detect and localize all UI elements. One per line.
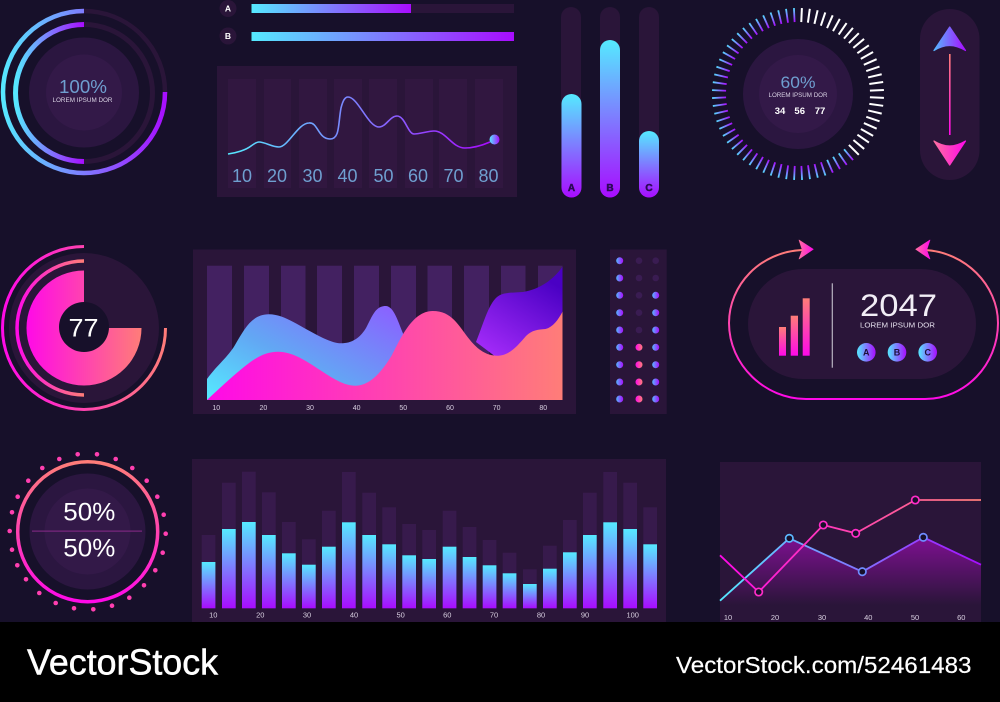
panel: bar chart: 50 — [397, 610, 405, 620]
panel: area chart: 60 — [446, 405, 454, 412]
dial gauge: 60%: 34 — [775, 106, 786, 117]
panel: two-series line chart: 10 — [724, 613, 732, 622]
gauge: 77 donut — [2, 246, 166, 410]
progress bars A and B — [220, 0, 514, 44]
panel: smooth line chart: 10 — [232, 166, 252, 186]
gauge: 100% rings: 100% — [59, 77, 107, 97]
panel: two-series line chart: 60 — [957, 613, 965, 622]
panel: bar chart: 60 — [443, 610, 451, 620]
panel: smooth line chart: 50 — [373, 166, 394, 186]
panel: two-series line chart: 40 — [864, 613, 872, 622]
panel: bar chart: 10 — [209, 610, 217, 620]
panel: bar chart: 90 — [581, 610, 589, 620]
panel: dot matrix — [610, 250, 667, 414]
panel: 2047 stat pill: C — [924, 348, 931, 358]
vertical bars A B C: B — [606, 183, 614, 194]
panel: bar chart: 80 — [537, 610, 545, 620]
panel: two-series line chart: 30 — [818, 613, 826, 622]
panel: smooth line chart: 70 — [443, 166, 464, 186]
panel: bar chart: 40 — [350, 610, 358, 620]
gauge: 100% rings: LOREM IPSUM DOR — [52, 97, 113, 104]
coloured ticks bottom and left side — [712, 8, 826, 180]
panel: bar chart: 30 — [303, 610, 311, 620]
panel: smooth line chart — [217, 66, 517, 197]
footer band — [0, 622, 1000, 702]
gauge: 50% / 50%: 50% — [63, 499, 115, 527]
white ticks — [800, 8, 884, 156]
dial gauge: 60%: 77 — [815, 106, 825, 117]
dial gauge: 60% — [712, 8, 884, 180]
footer band: VectorStock — [27, 641, 219, 682]
vertical bars A B C: A — [568, 183, 575, 194]
panel: 2047 stat pill: 2047 — [860, 287, 937, 323]
panel: area chart: 10 — [212, 405, 220, 412]
panel: area chart — [193, 250, 576, 414]
loop arrows around 2047 panel — [729, 240, 998, 399]
panel: two-series line chart — [720, 462, 981, 622]
panel: bar chart: 70 — [490, 610, 498, 620]
dial gauge: 60%: 56 — [794, 106, 805, 117]
panel: up and down arrows — [920, 9, 980, 180]
gauge: 77 donut: 77 — [68, 314, 98, 342]
panel: 2047 stat pill: LOREM IPSUM DOR — [860, 321, 936, 330]
panel: area chart: 80 — [539, 405, 547, 412]
panel: bar chart — [192, 459, 666, 622]
panel: bar chart: 20 — [256, 610, 264, 620]
progress bars A and B: B — [225, 31, 231, 41]
gauge: 50% / 50% — [7, 452, 168, 612]
panel: area chart: 50 — [399, 405, 407, 412]
panel: 2047 stat pill: B — [894, 348, 901, 358]
panel: smooth line chart: 80 — [478, 166, 499, 186]
gauge: 100% rings — [3, 11, 165, 173]
panel: area chart: 20 — [260, 405, 267, 412]
panel: 2047 stat pill — [748, 269, 976, 379]
vertical bars A B C: C — [645, 183, 653, 194]
dial gauge: 60%: 60% — [780, 73, 816, 92]
vertical bars A B C — [561, 7, 659, 198]
dial gauge: 60%: LOREM IPSUM DOR — [768, 92, 828, 99]
footer band: VectorStock.com/52461483 — [676, 652, 972, 678]
progress bars A and B: A — [225, 4, 231, 14]
gauge: 50% / 50%: 50% — [63, 535, 115, 563]
panel: area chart: 70 — [493, 405, 501, 412]
panel: area chart: 40 — [353, 405, 361, 412]
panel: smooth line chart: 40 — [337, 166, 358, 186]
panel: bar chart: 100 — [626, 610, 639, 620]
panel: smooth line chart: 60 — [408, 166, 428, 186]
panel: smooth line chart: 30 — [302, 166, 323, 186]
panel: 2047 stat pill: A — [863, 348, 870, 358]
panel: two-series line chart: 50 — [911, 613, 919, 622]
coloured ticks right of bottom — [826, 149, 854, 173]
panel: smooth line chart: 20 — [267, 166, 287, 186]
panel: two-series line chart: 20 — [771, 613, 779, 622]
panel: area chart: 30 — [306, 405, 314, 412]
